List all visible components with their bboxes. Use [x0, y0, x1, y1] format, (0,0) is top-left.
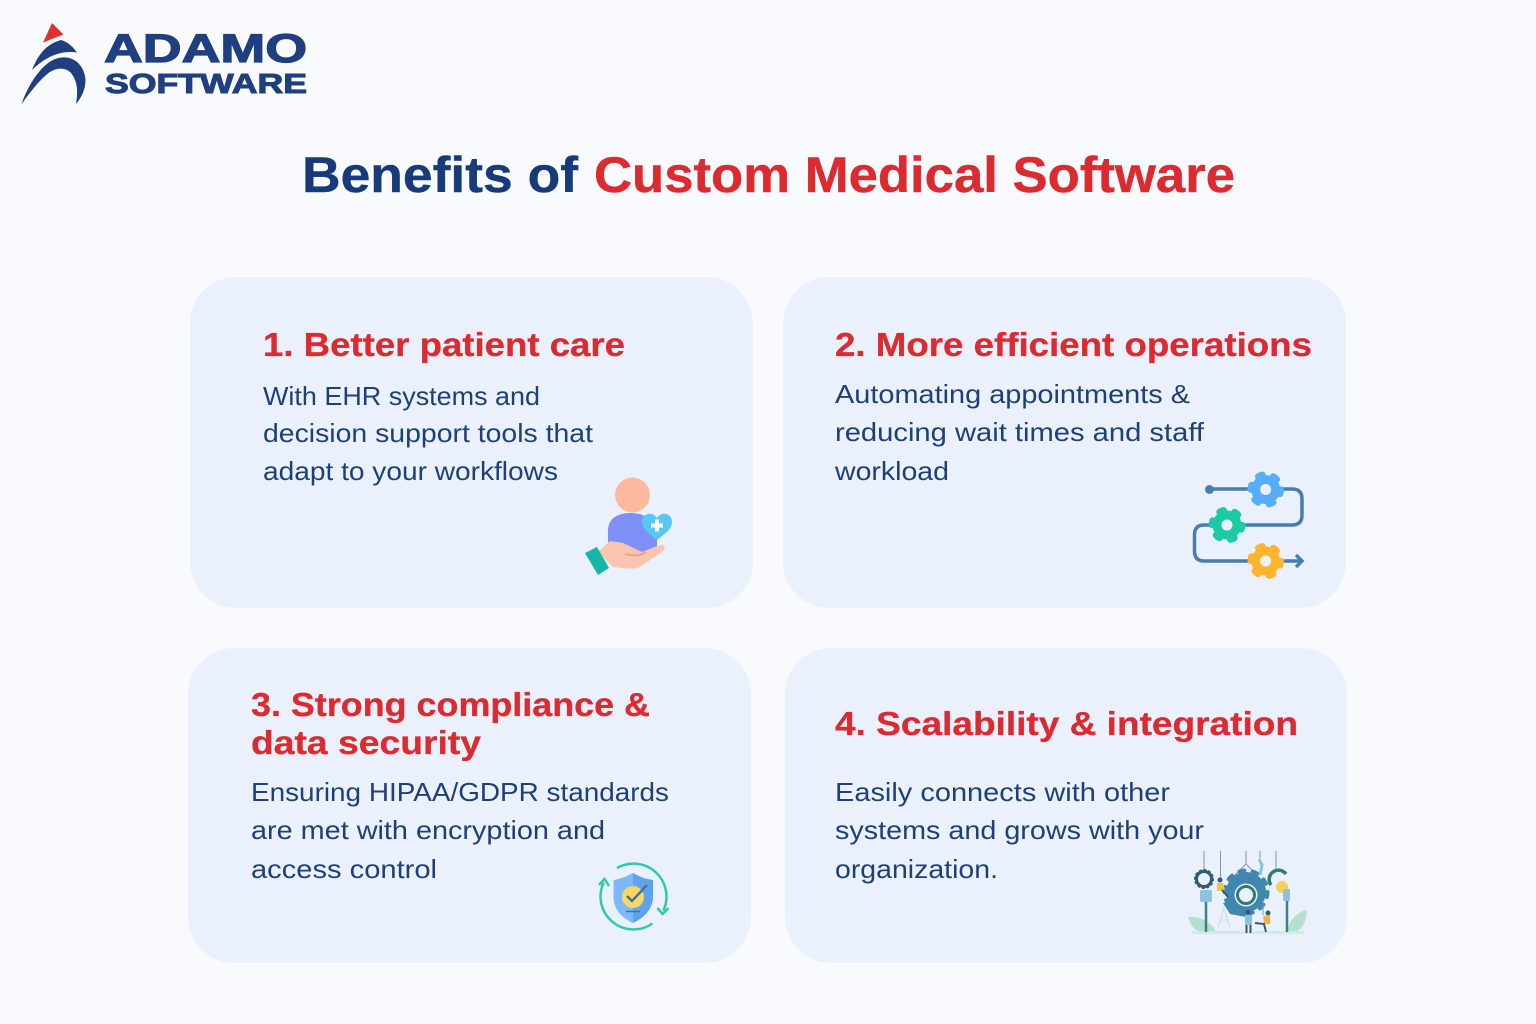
- body text 1: With EHR systems and: [263, 381, 540, 411]
- title: Benefits of: [302, 147, 578, 203]
- body text 3: access control: [251, 854, 437, 884]
- panel: scalability and integration: [785, 648, 1347, 963]
- heading 3: 3. Strong compliance &: [251, 686, 650, 723]
- heading 1: 1. Better patient care: [263, 326, 625, 363]
- heading 3: data security: [251, 724, 482, 761]
- logo mark: [22, 23, 86, 104]
- panel: more efficient operations: [783, 277, 1346, 608]
- body text 1: decision support tools that: [263, 418, 594, 448]
- heading 3: [251, 686, 650, 761]
- body text 3: are met with encryption and: [251, 815, 605, 845]
- icon: team assembling gears: [1188, 851, 1307, 933]
- body text 1: adapt to your workflows: [263, 456, 558, 486]
- body text 1: [263, 381, 594, 486]
- title: Custom Medical Software: [594, 147, 1235, 203]
- body text 2: [834, 379, 1205, 486]
- body text 2: Automating appointments &: [835, 379, 1190, 409]
- body text 3: [251, 777, 669, 884]
- body text 4: Easily connects with other: [835, 777, 1170, 807]
- logo wordmark: [104, 27, 307, 99]
- heading 2: 2. More efficient operations: [835, 326, 1312, 363]
- heading 4: 4. Scalability & integration: [835, 705, 1298, 742]
- icon: gears workflow: [1194, 474, 1302, 576]
- title: [302, 147, 1235, 203]
- body text 4: systems and grows with your: [835, 815, 1204, 845]
- body text 3: Ensuring HIPAA/GDPR standards: [251, 777, 669, 807]
- body text 2: workload: [834, 456, 949, 486]
- logo: Adamo Software: [22, 23, 307, 104]
- logo wordmark: ADAMO: [104, 27, 307, 71]
- body text 4: [835, 777, 1204, 884]
- icon: caring hand with patient and heart: [585, 478, 672, 575]
- body text 2: reducing wait times and staff: [835, 417, 1205, 447]
- body text 4: organization.: [835, 854, 998, 884]
- panel: better patient care: [190, 277, 753, 608]
- panel: strong compliance and data security: [188, 648, 751, 963]
- logo wordmark: SOFTWARE: [105, 68, 307, 99]
- icon: security shield: [599, 864, 668, 929]
